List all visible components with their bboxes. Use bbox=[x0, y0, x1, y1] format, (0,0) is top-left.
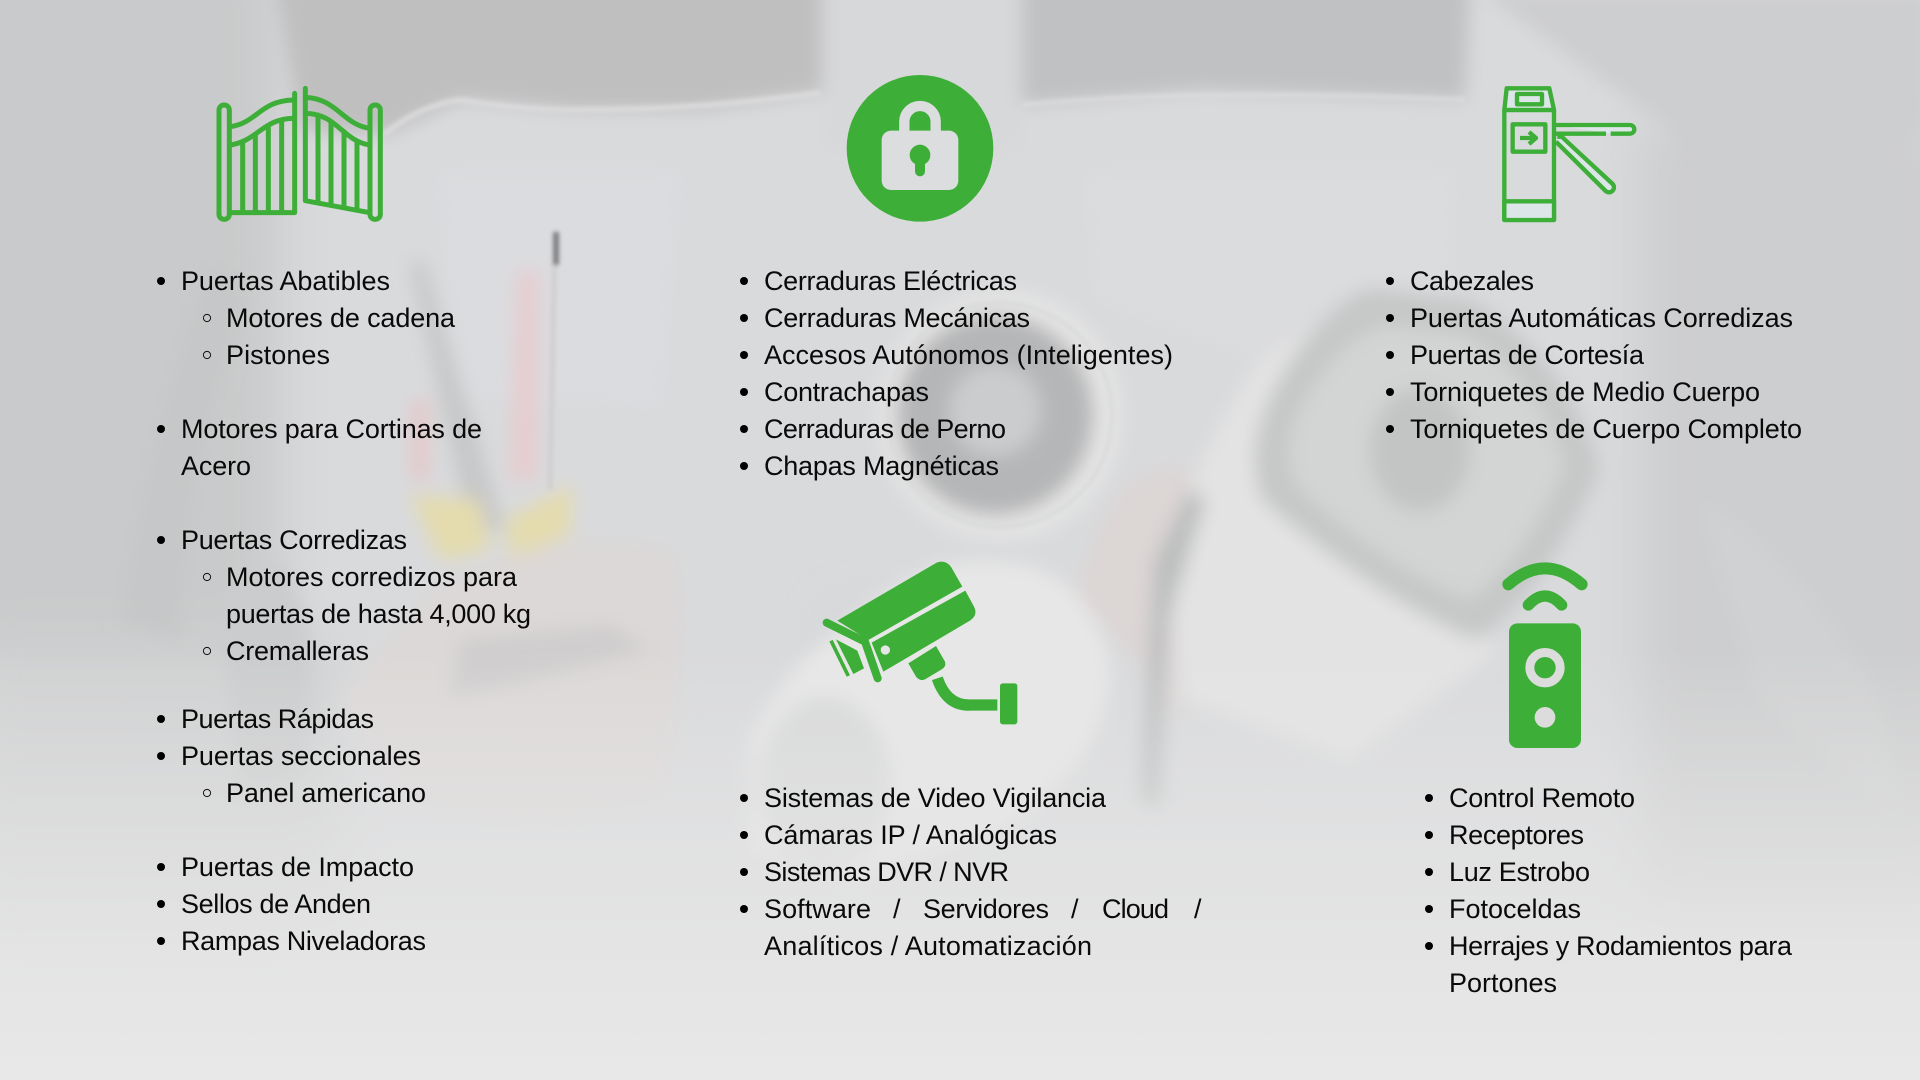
list: locks: Cerraduras de Perno bbox=[764, 414, 1006, 444]
list: remote controls: Receptores bbox=[1449, 820, 1584, 850]
list: access control: Torniquetes de Medio Cuerpo bbox=[1410, 377, 1760, 407]
icon: security camera bbox=[827, 562, 1017, 724]
list: doors and gates: Motores corredizos para bbox=[226, 562, 518, 592]
list: doors and gates: Motores para Cortinas de bbox=[181, 414, 482, 444]
list: video surveillance: / bbox=[1071, 894, 1079, 924]
list: video surveillance: Cloud bbox=[1102, 894, 1169, 924]
icon: padlock in circle bbox=[847, 75, 993, 222]
list: doors and gates: Puertas de Impacto bbox=[181, 852, 414, 882]
list: access control: Puertas Automáticas Corredizas bbox=[1410, 303, 1793, 333]
list: remote controls: Fotoceldas bbox=[1449, 894, 1581, 924]
list: remote controls bbox=[1425, 783, 1793, 998]
list: remote controls: Herrajes y Rodamientos para bbox=[1449, 931, 1793, 961]
list: access control bbox=[1386, 266, 1802, 444]
list: remote controls: Portones bbox=[1449, 968, 1557, 998]
list: doors and gates: Sellos de Anden bbox=[181, 889, 371, 919]
list: video surveillance: Sistemas DVR / NVR bbox=[764, 857, 1009, 887]
list: video surveillance bbox=[740, 783, 1202, 961]
list: doors and gates bbox=[157, 266, 531, 956]
list: remote controls: Luz Estrobo bbox=[1449, 857, 1590, 887]
list: access control: Cabezales bbox=[1410, 266, 1534, 296]
icon: swing gate bbox=[219, 88, 380, 219]
list: doors and gates: Motores de cadena bbox=[226, 303, 456, 333]
list: video surveillance: Software bbox=[764, 894, 871, 924]
list: locks: Chapas Magnéticas bbox=[764, 451, 999, 481]
list: doors and gates: Puertas Abatibles bbox=[181, 266, 390, 296]
list: doors and gates: Panel americano bbox=[226, 778, 426, 808]
list: doors and gates: Pistones bbox=[226, 340, 330, 370]
list: doors and gates: Puertas Rápidas bbox=[181, 704, 374, 734]
list: doors and gates: Puertas seccionales bbox=[181, 741, 421, 771]
list: video surveillance: Sistemas de Video Vigilancia bbox=[764, 783, 1107, 813]
list: locks bbox=[740, 266, 1173, 481]
list: remote controls: Control Remoto bbox=[1449, 783, 1635, 813]
list: video surveillance: Analíticos / Automatización bbox=[764, 931, 1092, 961]
icon: remote control with signal bbox=[1508, 568, 1582, 748]
list: video surveillance: Cámaras IP / Analógicas bbox=[764, 820, 1057, 850]
icon: turnstile bbox=[1504, 88, 1634, 220]
list: doors and gates: Puertas Corredizas bbox=[181, 525, 407, 555]
list: access control: Puertas de Cortesía bbox=[1410, 340, 1645, 370]
list: video surveillance: Servidores bbox=[923, 894, 1049, 924]
list: video surveillance: / bbox=[1194, 894, 1202, 924]
list: video surveillance: / bbox=[893, 894, 901, 924]
list: access control: Torniquetes de Cuerpo Completo bbox=[1410, 414, 1802, 444]
list: doors and gates: puertas de hasta 4,000 kg bbox=[226, 599, 531, 629]
list: locks: Cerraduras Eléctricas bbox=[764, 266, 1017, 296]
list: doors and gates: Cremalleras bbox=[226, 636, 369, 666]
list: doors and gates: Rampas Niveladoras bbox=[181, 926, 426, 956]
list: locks: Contrachapas bbox=[764, 377, 929, 407]
list: doors and gates: Acero bbox=[181, 451, 251, 481]
list: locks: Cerraduras Mecánicas bbox=[764, 303, 1030, 333]
list: locks: Accesos Autónomos (Inteligentes) bbox=[764, 340, 1173, 370]
